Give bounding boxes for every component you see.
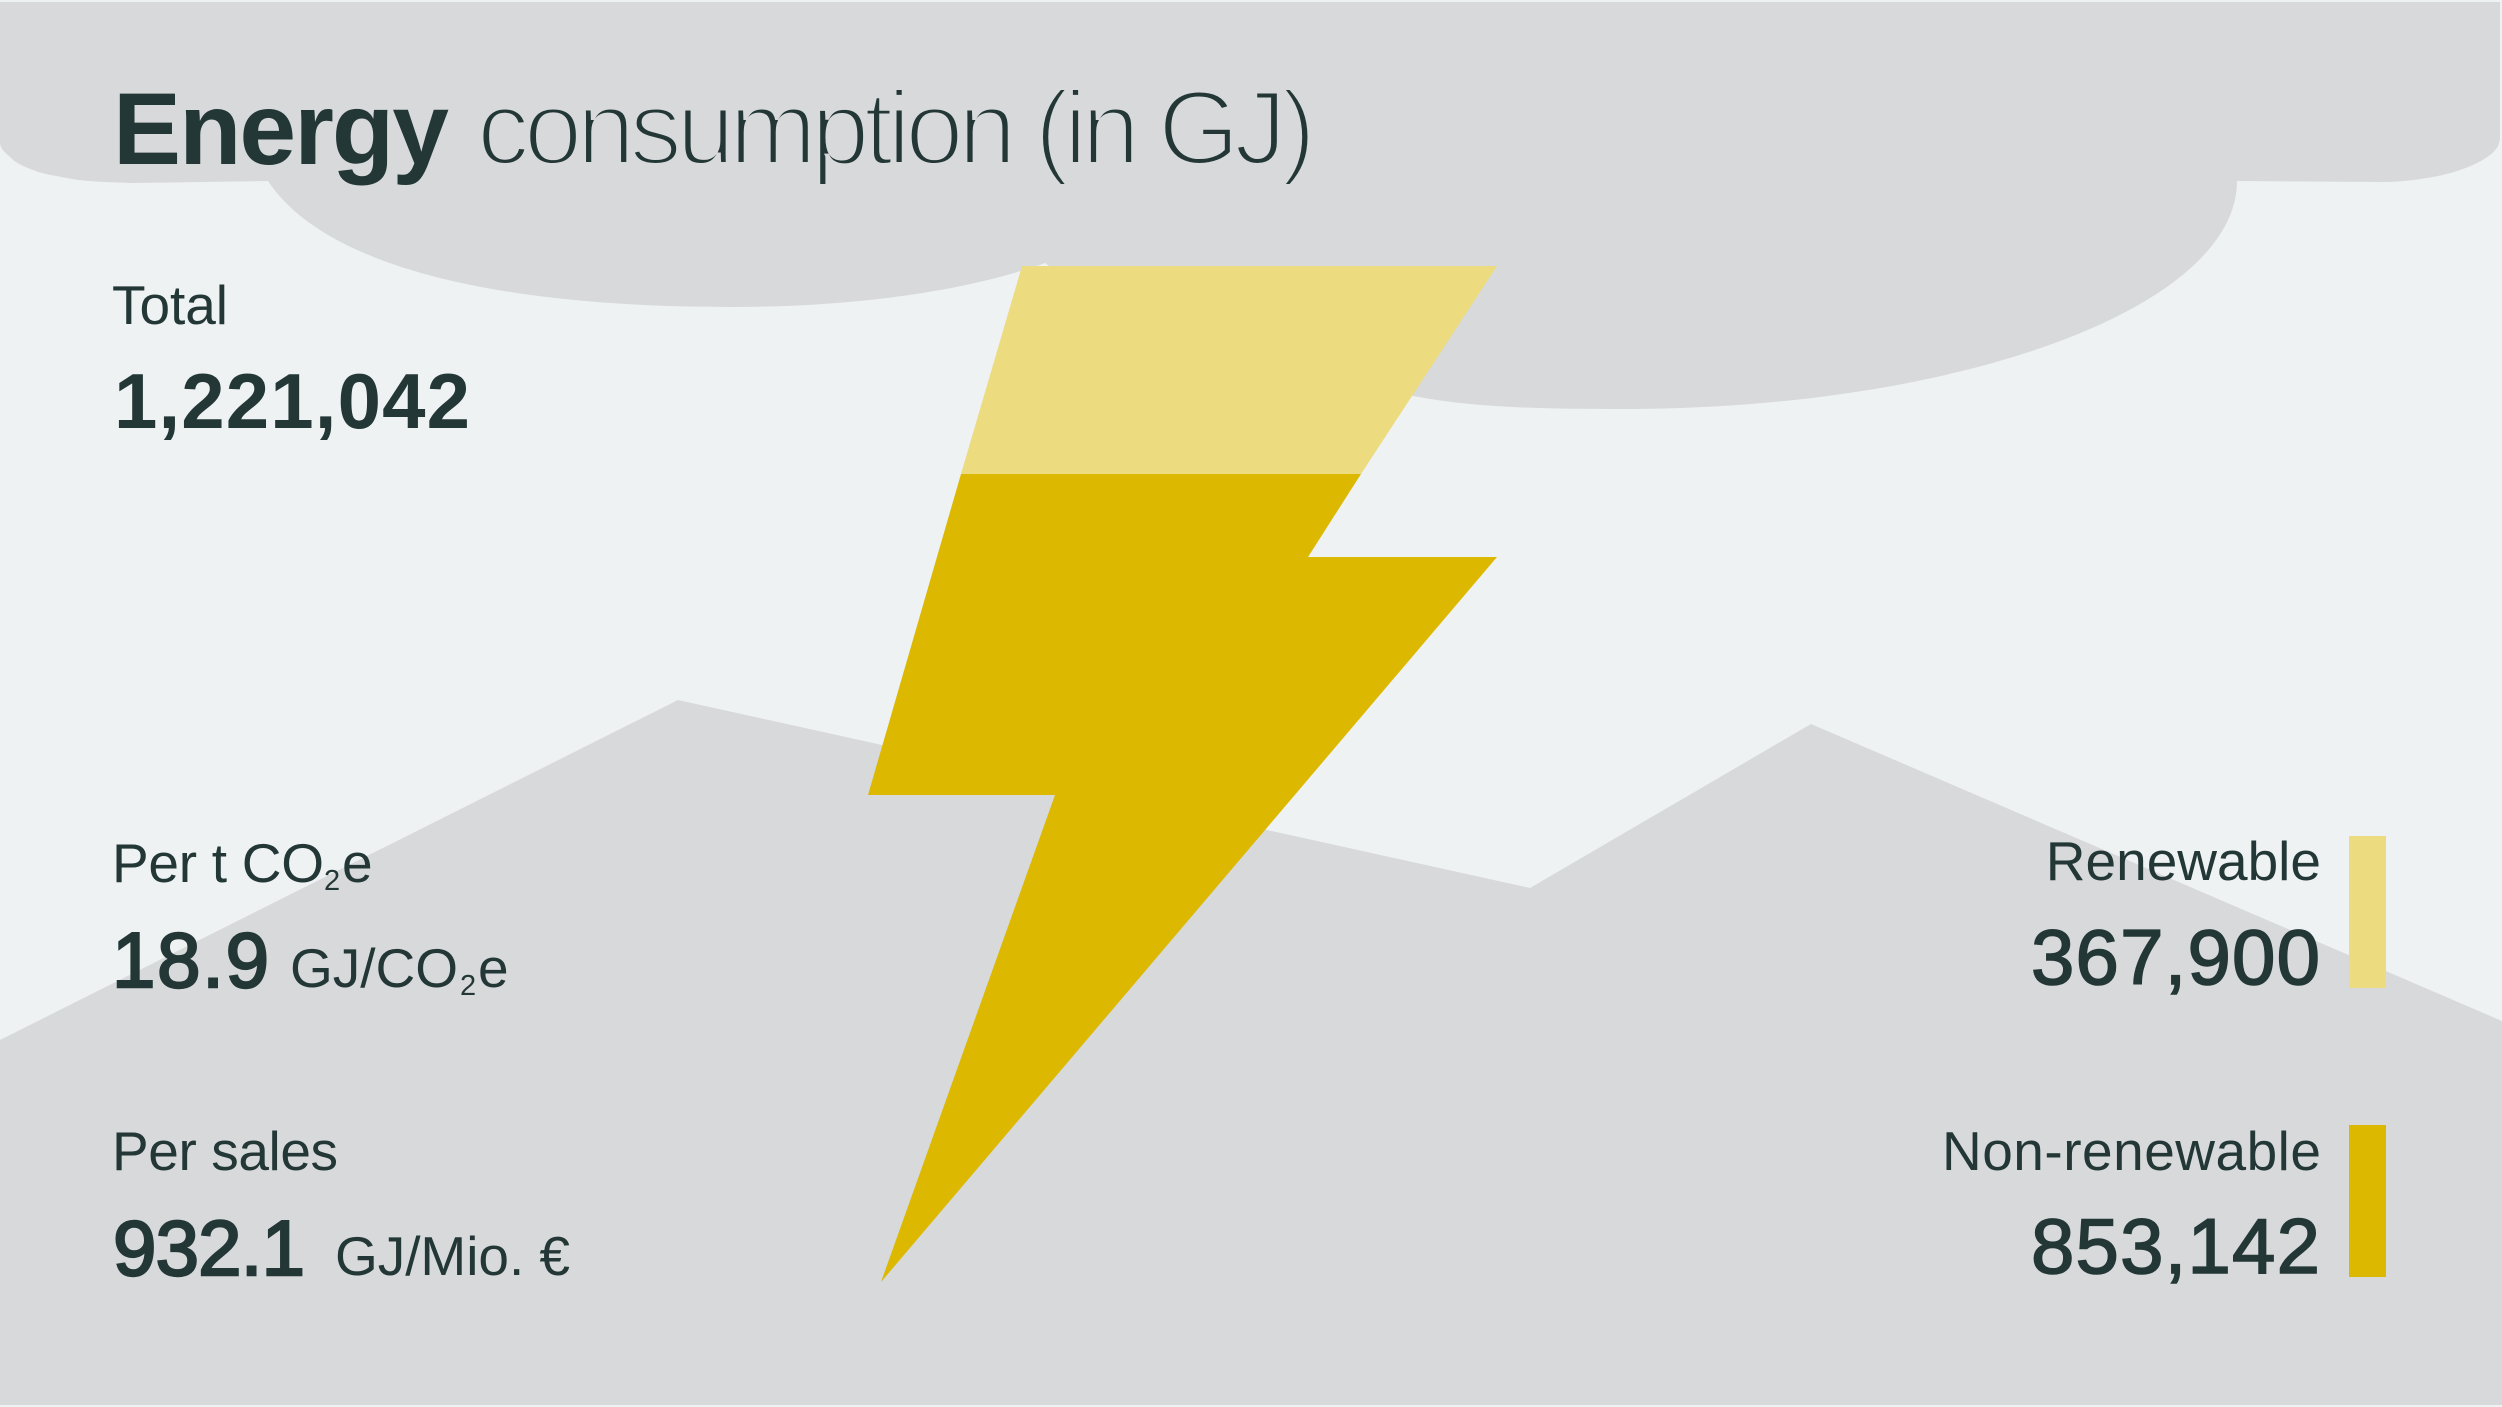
per t CO2e value: 18.9 [112,916,269,1004]
total label: Total [112,274,228,336]
renewable swatch [2349,836,2386,988]
renewable value: 367,900 [2031,913,2320,1001]
per t CO2e unit: 2 [460,970,476,1002]
stat: per sales [112,1120,570,1292]
mountains [0,700,2502,1405]
per sales unit: GJ/Mio. € [335,1225,570,1287]
per sales label: Per sales [112,1120,338,1182]
legend: non-renewable [1942,1120,2386,1290]
stat: total [112,274,470,445]
total value: 1,221,042 [114,357,470,445]
bolt: renewable share [961,266,1497,474]
non-renewable label: Non-renewable [1942,1120,2321,1182]
per t CO2e unit: e [478,937,509,999]
title: light words: consumption (in GJ) [477,70,1316,187]
title: bold word: Energy [113,72,449,186]
per t CO2e label: e [342,832,373,894]
title [113,70,1316,187]
legend: renewable [2031,830,2386,1001]
cloud [0,2,2500,409]
per t CO2e unit: GJ/CO [290,937,458,999]
non-renewable value: 853,142 [2031,1202,2320,1290]
stat: per t CO2e [112,832,509,1004]
renewable label: Renewable [2046,830,2321,892]
per t CO2e label: Per t CO [112,832,324,894]
lightning bolt [868,266,1497,1282]
bolt: non-renewable share [868,474,1497,1282]
non-renewable swatch [2349,1125,2386,1277]
per sales value: 932.1 [113,1204,305,1292]
per t CO2e label: 2 [324,865,340,897]
